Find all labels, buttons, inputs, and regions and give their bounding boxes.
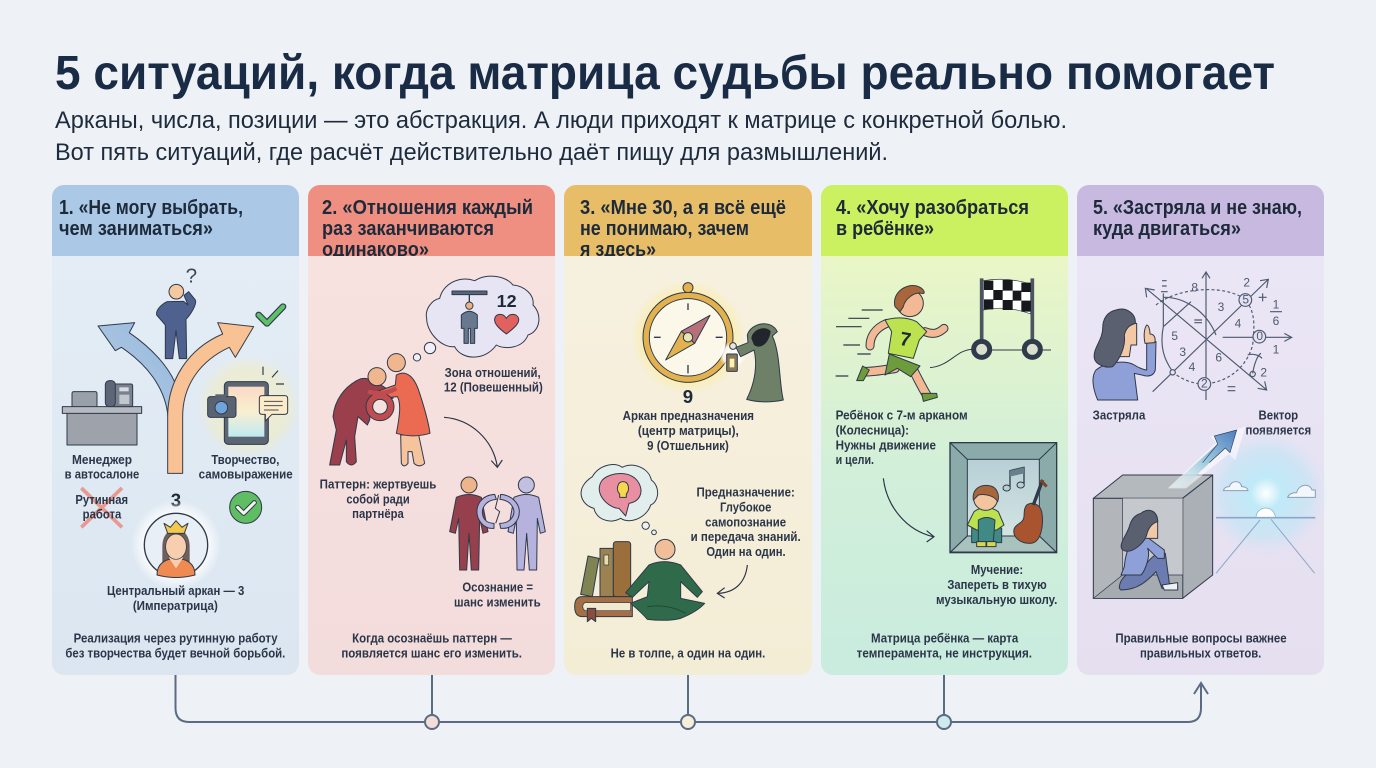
caption: creativity: Творчество, bbox=[211, 453, 279, 467]
panel 4 header bbox=[821, 185, 1068, 260]
caption: awareness: Осознание = bbox=[462, 581, 533, 595]
takeaway text bbox=[857, 632, 1032, 660]
caption: child with arcana 7: и цели. bbox=[836, 453, 874, 467]
takeaway text: без творчества будет вечной борьбой. bbox=[65, 646, 285, 660]
caption: creativity bbox=[199, 453, 293, 481]
panel 5 header: 5. «Застряла и не знаю, bbox=[1093, 197, 1302, 219]
chart numbers: 5 bbox=[1242, 292, 1249, 306]
intro text: Арканы, числа, позиции — это абстракция. А люди приходят к матрице с конкретной болью. bbox=[55, 107, 1067, 134]
caption: pattern bbox=[320, 478, 437, 521]
chart numbers: 8 bbox=[1191, 281, 1198, 295]
takeaway text bbox=[1115, 632, 1287, 660]
panel 2 header: одинаково» bbox=[322, 239, 429, 261]
panel 1 header: 1. «Не могу выбрать, bbox=[59, 197, 243, 219]
chart numbers: 1 bbox=[1273, 342, 1280, 356]
icon: woman inside a box bbox=[1093, 475, 1213, 598]
intro text: Вот пять ситуаций, где расчёт действительно даёт пищу для размышлений. bbox=[55, 139, 888, 166]
number 3: 3 bbox=[171, 489, 181, 510]
caption: creativity: самовыражение bbox=[199, 467, 293, 481]
caption: stuck: Застряла bbox=[1093, 409, 1146, 423]
caption: torment bbox=[936, 563, 1057, 607]
caption: purpose explanation: Один на один. bbox=[706, 545, 786, 559]
caption: purpose arcana: 9 (Отшельник) bbox=[647, 439, 729, 453]
horizon with sun and clouds bbox=[1203, 430, 1329, 573]
caption: torment: Мучение: bbox=[971, 563, 1023, 577]
chart numbers: 3 bbox=[1218, 300, 1225, 314]
icon: figures with broken ring bbox=[450, 477, 545, 570]
title: 5 ситуаций, когда матрица судьбы реально помогает bbox=[55, 47, 1275, 100]
icon: stack of books bbox=[575, 542, 632, 622]
panel 4 illustration and captions bbox=[836, 278, 1057, 660]
panel 4 header: в ребёнке» bbox=[836, 218, 934, 240]
caption: central arcana: (Императрица) bbox=[133, 599, 218, 613]
panel 4 header: 4. «Хочу разобраться bbox=[836, 197, 1029, 219]
thought cloud: brain with bulb bbox=[581, 465, 658, 535]
panel 1 header: чем заниматься» bbox=[59, 218, 213, 240]
caption: purpose explanation bbox=[691, 486, 801, 559]
icon: green check circle bbox=[230, 491, 262, 523]
takeaway text: Матрица ребёнка — карта bbox=[871, 632, 1019, 646]
icon: couple tied in a knot bbox=[330, 354, 430, 466]
takeaway text bbox=[65, 632, 285, 660]
takeaway text: Когда осознаёшь паттерн — bbox=[352, 632, 512, 646]
panel 2 header: 2. «Отношения каждый bbox=[322, 197, 533, 219]
panel 3: life purpose bbox=[564, 185, 812, 675]
icon: thinking person: ? bbox=[186, 265, 197, 288]
caption: purpose explanation: Предназначение: bbox=[696, 486, 795, 500]
panel 2 header: раз заканчиваются bbox=[322, 218, 494, 240]
arrow: right orange path bbox=[168, 323, 254, 473]
chart: destiny matrix diagram bbox=[1145, 272, 1292, 400]
caption: pattern: партнёра bbox=[352, 507, 405, 521]
arrow: left blue path bbox=[98, 323, 176, 417]
icon: child in a box with violin bbox=[950, 443, 1057, 553]
icon: empress portrait bbox=[131, 500, 221, 590]
caption: awareness: шанс изменить bbox=[454, 596, 541, 610]
caption: purpose arcana: Аркан предназначения bbox=[623, 409, 754, 423]
panel 5 illustration and captions bbox=[1093, 272, 1329, 660]
caption: child with arcana 7: Ребёнок с 7-м арканом bbox=[836, 409, 968, 423]
panel 3 illustration and captions bbox=[575, 281, 801, 660]
chart numbers: 2 bbox=[1260, 366, 1267, 380]
chart numbers: 2 bbox=[1201, 376, 1208, 390]
takeaway text: темперамента, не инструкция. bbox=[857, 646, 1032, 660]
chart numbers: 6 bbox=[1273, 314, 1280, 328]
panel 5: stuck bbox=[1077, 185, 1329, 675]
panel 2 illustration and captions bbox=[320, 276, 545, 660]
chart numbers: 4 bbox=[1235, 317, 1242, 331]
chart numbers: 2 bbox=[1243, 276, 1250, 290]
caption: manager bbox=[65, 453, 139, 481]
chart numbers bbox=[1171, 276, 1280, 390]
caption: torment: музыкальную школу. bbox=[936, 593, 1057, 607]
crossed out routine work: Рутинная bbox=[75, 493, 128, 507]
connector line with arrow bbox=[176, 675, 1208, 729]
arrow: to meditating person bbox=[717, 565, 747, 598]
caption: vector appears: появляется bbox=[1245, 423, 1311, 437]
takeaway text: Реализация через рутинную работу bbox=[74, 632, 278, 646]
caption: vector appears: Вектор bbox=[1258, 409, 1298, 423]
caption: child with arcana 7: Нужны движение bbox=[836, 438, 936, 452]
icon: hermit with lantern bbox=[719, 324, 783, 402]
caption: central arcana bbox=[107, 584, 244, 613]
caption: relationship zone: 12 (Повешенный) bbox=[444, 381, 543, 395]
takeaway text bbox=[341, 632, 522, 660]
icon: compass bbox=[631, 281, 745, 394]
caption: torment: Запереть в тихую bbox=[947, 578, 1047, 592]
caption: child with arcana 7 bbox=[836, 409, 968, 467]
panel 3 header: я здесь» bbox=[579, 239, 656, 261]
icon: green tick bbox=[259, 307, 283, 323]
caption: manager: Менеджер bbox=[72, 453, 132, 467]
caption: child with arcana 7: (Колесница): bbox=[836, 423, 909, 437]
chart numbers: 6 bbox=[1215, 351, 1222, 365]
caption: purpose explanation: и передача знаний. bbox=[691, 530, 801, 544]
caption: pattern: Паттерн: жертвуешь bbox=[320, 478, 437, 492]
caption: purpose arcana bbox=[623, 409, 754, 453]
panel 1 header bbox=[52, 185, 299, 260]
arrow: rising vector bbox=[1168, 427, 1245, 488]
thought cloud: hanged man and heart bbox=[413, 276, 539, 361]
icon: running boy number 7: 7 bbox=[898, 329, 912, 352]
chart numbers: 1 bbox=[1273, 298, 1280, 312]
panel 2 header bbox=[308, 185, 555, 261]
chart numbers: 5 bbox=[1171, 329, 1178, 343]
caption: purpose arcana: (центр матрицы), bbox=[638, 424, 739, 438]
number 9: 9 bbox=[683, 386, 693, 407]
icon: thinking person bbox=[156, 265, 197, 359]
caption: purpose explanation: Глубокое bbox=[720, 501, 771, 515]
icon: meditating person bbox=[626, 539, 705, 620]
caption: purpose explanation: самопознание bbox=[705, 515, 786, 529]
arrow: to realisation bbox=[444, 417, 502, 467]
icon: finish flag on wheels bbox=[930, 278, 1051, 368]
panel 3 header: не понимаю, зачем bbox=[580, 218, 749, 240]
caption: vector appears bbox=[1245, 409, 1311, 437]
panel 1 illustration and captions bbox=[62, 265, 300, 660]
panel 2: relationships bbox=[308, 185, 555, 675]
intro text bbox=[55, 107, 1067, 166]
takeaway text: правильных ответов. bbox=[1140, 646, 1261, 660]
caption: awareness bbox=[454, 581, 541, 610]
icon: office desk with phone bbox=[62, 381, 142, 445]
chart numbers: 4 bbox=[1189, 360, 1196, 374]
caption: manager: в автосалоне bbox=[65, 467, 139, 481]
icon: woman pointing bbox=[1093, 309, 1156, 400]
crossed out routine work bbox=[75, 488, 128, 527]
arrow: to music room bbox=[883, 478, 934, 542]
icon: running boy number 7 bbox=[836, 286, 944, 401]
caption: pattern: собой ради bbox=[346, 493, 410, 507]
crossed out routine work: работа bbox=[83, 508, 122, 522]
takeaway text: Правильные вопросы важнее bbox=[1115, 632, 1287, 646]
panel 5 header bbox=[1077, 185, 1324, 260]
panel 3 header bbox=[564, 185, 812, 261]
thought cloud: hanged man and heart: 12 bbox=[497, 291, 517, 311]
caption: relationship zone: Зона отношений, bbox=[445, 366, 541, 380]
panel 3 header: 3. «Мне 30, а я всё ещё bbox=[580, 197, 786, 219]
chart numbers: 0 bbox=[1256, 329, 1263, 343]
chart numbers: 3 bbox=[1179, 345, 1186, 359]
takeaway text: Не в толпе, а один на один. bbox=[611, 646, 765, 660]
panel 4: child bbox=[821, 185, 1068, 675]
takeaway text: появляется шанс его изменить. bbox=[341, 646, 522, 660]
caption: relationship zone bbox=[444, 366, 543, 395]
panel 1: choice of occupation bbox=[52, 185, 300, 675]
caption: central arcana: Центральный аркан — 3 bbox=[107, 584, 244, 598]
panel 5 header: куда двигаться» bbox=[1093, 218, 1241, 240]
icon: tablet, camera and chat bbox=[197, 355, 300, 458]
